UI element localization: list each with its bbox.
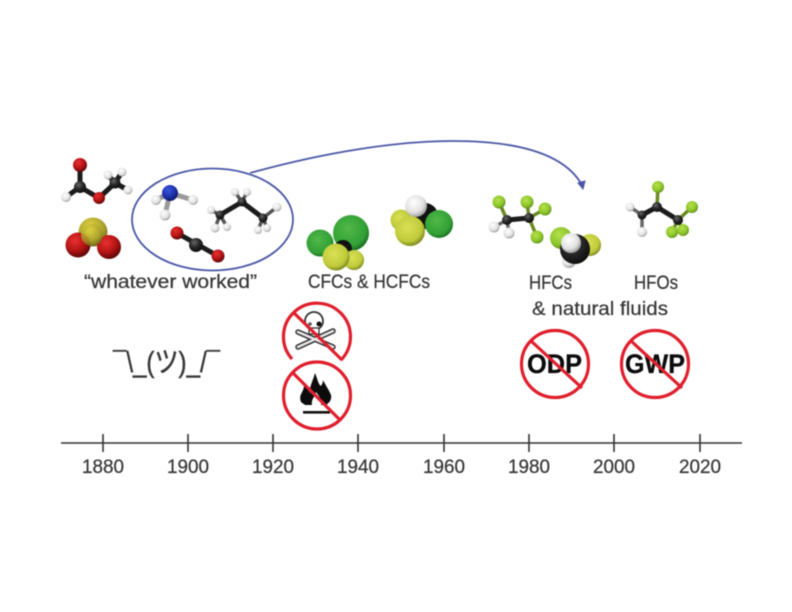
molecule: carbon dioxide	[170, 226, 224, 262]
year labels: 1920	[252, 457, 294, 478]
ellipse around ammonia, propane and carbon dioxide	[132, 168, 293, 270]
molecule: propane	[207, 188, 282, 234]
molecule: HFO ball and stick	[626, 181, 698, 238]
molecule: sulfur dioxide	[66, 218, 121, 259]
label: whatever worked: “whatever worked”	[84, 272, 257, 293]
molecule: HFC space-filling	[550, 227, 601, 268]
year labels: 1900	[167, 457, 209, 478]
molecule: methyl formate	[61, 158, 132, 204]
skull and crossbones	[298, 312, 333, 347]
year labels: 1960	[423, 457, 465, 478]
icon: no GWP: GWP	[625, 349, 685, 379]
icon: no toxicity	[283, 303, 350, 360]
label: natural fluids: & natural fluids	[532, 299, 668, 320]
icon: no GWP	[622, 330, 688, 398]
label: HFCs: HFCs	[529, 273, 572, 294]
label: HFOs: HFOs	[634, 273, 678, 294]
icon: no ODP: ODP	[527, 349, 582, 379]
arrow from ellipse to HFCs	[250, 141, 585, 189]
year labels: 1980	[508, 457, 550, 478]
flame	[300, 373, 331, 405]
timeline axis	[61, 434, 742, 478]
flame base	[303, 411, 330, 414]
year labels: 1940	[337, 457, 379, 478]
shrug emoticon: ¯\_(ツ)_/¯	[112, 347, 221, 379]
year labels: 2000	[593, 457, 635, 478]
icon: no flammability	[284, 362, 350, 429]
molecule: HCFC space-filling	[390, 195, 453, 246]
year labels	[82, 457, 721, 478]
icon: no ODP	[522, 330, 588, 398]
molecule: HFC ball and stick	[488, 196, 552, 244]
year labels: 1880	[82, 457, 124, 478]
molecule: CFC space-filling	[306, 215, 369, 270]
molecule: ammonia	[151, 185, 198, 220]
label: CFCs and HCFCs: CFCs & HCFCs	[308, 272, 430, 293]
year labels: 2020	[679, 457, 721, 478]
